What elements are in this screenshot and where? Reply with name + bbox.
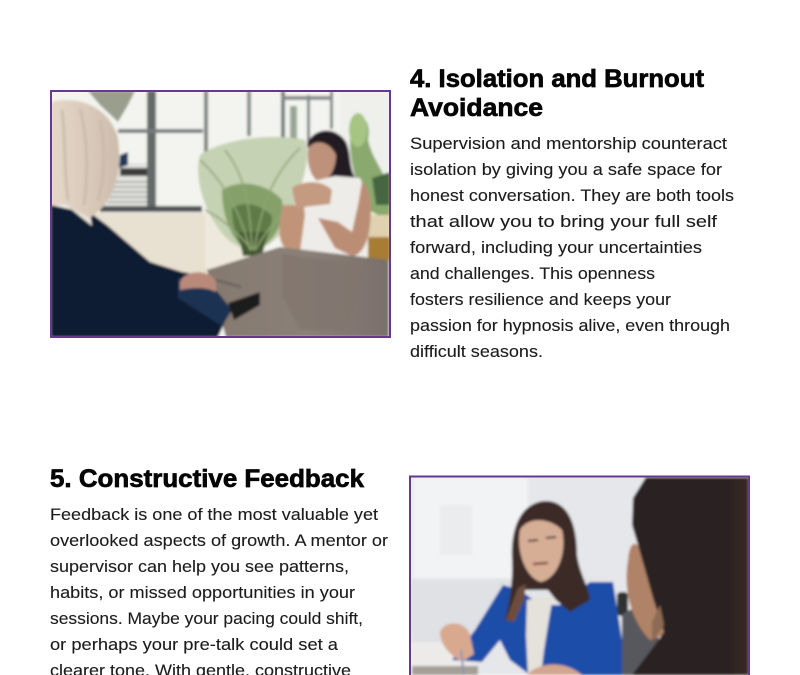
heading: section 4: 4. Isolation and Burnout	[410, 65, 705, 93]
text block: section 4 body: and challenges. This openness	[410, 265, 655, 283]
text block: section 4 body: that allow you to bring your full self	[410, 213, 717, 231]
text block: section 5 body: supervisor can help you see patterns,	[50, 558, 349, 576]
panel: section 5	[50, 465, 749, 675]
face	[519, 520, 563, 582]
page canvas	[50, 68, 750, 675]
heading: section 5: 5. Constructive Feedback	[50, 465, 364, 493]
text block: section 4 body: fosters resilience and keeps your	[410, 291, 672, 309]
woman	[307, 131, 358, 182]
shirt	[526, 596, 553, 675]
text block: section 5 body: or perhaps your pre-talk could set a	[50, 636, 339, 654]
text block: section 4 body	[410, 135, 734, 361]
photo: woman in blue blazer talking to a colleague	[410, 476, 749, 675]
text block: section 5 body: sessions. Maybe your pacing could shift,	[50, 610, 363, 628]
text block: section 5 body	[50, 506, 389, 675]
hand	[440, 623, 474, 662]
panel: section 4	[51, 65, 734, 361]
foliage	[198, 137, 307, 250]
left person	[51, 205, 230, 337]
blazer	[452, 582, 622, 675]
text block: section 4 body: Supervision and mentorship counteract	[410, 135, 727, 153]
photo: two women talking at a table by a window	[51, 91, 390, 337]
text block: section 5 body: overlooked aspects of growth. A mentor or	[50, 532, 389, 550]
text block: section 5 body: habits, or missed opportunities in your	[50, 584, 356, 602]
hair	[505, 501, 590, 622]
text block: section 4 body: honest conversation. They are both tools	[410, 187, 734, 205]
right person	[622, 609, 662, 675]
text block: section 4 body: isolation by giving you a safe space for	[410, 161, 723, 179]
text block: section 5 body: Feedback is one of the most valuable yet	[50, 506, 378, 524]
heading: section 4: Avoidance	[410, 94, 543, 122]
text block: section 4 body: forward, including your uncertainties	[410, 239, 702, 257]
text block: section 4 body: difficult seasons.	[410, 343, 543, 361]
text block: section 4 body: passion for hypnosis alive, even through	[410, 317, 730, 335]
heading: section 4	[410, 65, 705, 122]
table	[207, 247, 389, 337]
